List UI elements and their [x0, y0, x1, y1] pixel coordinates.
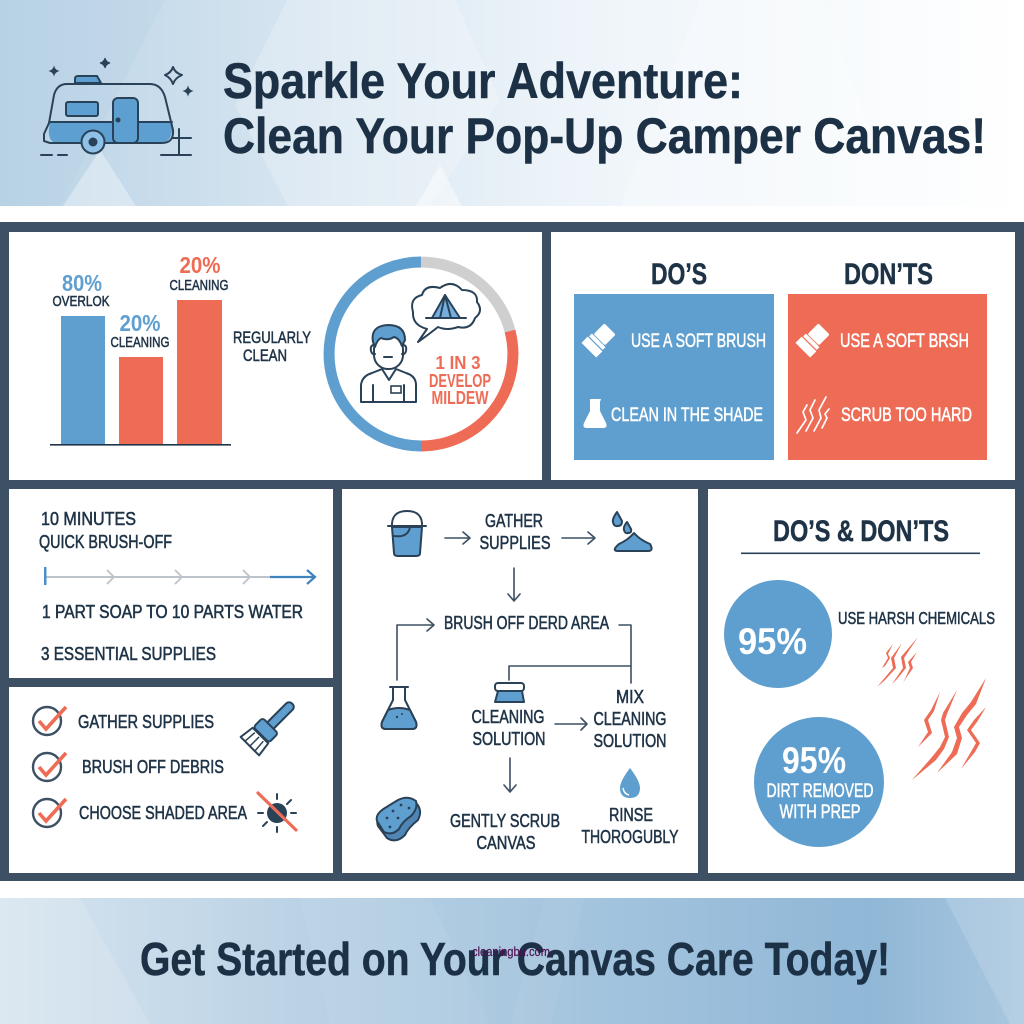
icon: crossed-out sun — [258, 793, 296, 832]
do's box: CLEAN IN THE SHADE — [611, 405, 763, 426]
icon: paint brush — [241, 695, 301, 755]
do's box: USE A SOFT BRUSH — [631, 331, 766, 352]
bar chart — [50, 252, 231, 446]
watermark: cleaningbu.com — [472, 944, 550, 959]
step: mix cleaning solution — [594, 687, 666, 751]
stat circle: 95%: 95% — [738, 621, 807, 662]
heading: DO’S & DON’TS — [773, 515, 949, 548]
check item: choose shaded area: CHOOSE SHADED AREA — [79, 802, 248, 823]
title: Sparkle Your Adventure: — [223, 53, 743, 109]
check item: choose shaded area — [33, 799, 248, 827]
stat circle: dirt removed: DIRT REMOVED — [766, 781, 874, 802]
connector — [509, 625, 631, 683]
fact: ten minutes: 10 MINUTES — [41, 509, 136, 529]
step: brush off area: BRUSH OFF DERD AREA — [444, 613, 609, 633]
stat circle: dirt removed: WITH PREP — [780, 802, 860, 823]
header banner — [0, 0, 1024, 206]
icon: person — [361, 325, 416, 402]
icon: soap drops — [613, 512, 652, 551]
bar chart: CLEANING — [110, 334, 170, 351]
icon: camper trailer with sparkles — [41, 58, 192, 155]
step: gather supplies — [480, 511, 550, 553]
fact: ten minutes: QUICK BRUSH-OFF — [39, 532, 172, 552]
icon: large scratches — [912, 678, 986, 780]
step: gather supplies: GATHER — [485, 511, 543, 531]
step: gather supplies: SUPPLIES — [480, 533, 550, 553]
timeline arrow — [44, 567, 315, 585]
regularly clean label — [233, 328, 311, 365]
stat circle: 95% — [724, 580, 832, 688]
bar chart: CLEANING — [170, 277, 228, 294]
step: rinse thoroughly: THOROGUBLY — [582, 827, 678, 847]
panel: do's and don'ts stats — [708, 489, 1015, 873]
bar chart: 20% — [120, 310, 160, 336]
step: gently scrub canvas: CANVAS — [476, 833, 536, 853]
icon: thought bubble with tent — [412, 284, 480, 342]
do's heading: DO’S — [651, 258, 707, 291]
step: rinse thoroughly — [582, 805, 678, 847]
step: cleaning solution: SOLUTION — [472, 729, 546, 749]
don'ts heading: DON’TS — [844, 258, 933, 291]
step: cleaning solution — [472, 707, 546, 749]
bar chart: 20% — [180, 252, 220, 278]
arrow — [504, 758, 516, 792]
fact: essential supplies: 3 ESSENTIAL SUPPLIES — [41, 644, 216, 664]
call to action: Get Started on Your Canvas Care Today! — [140, 933, 890, 985]
title — [223, 53, 986, 164]
don'ts box: SCRUB TOO HARD — [841, 405, 972, 426]
icon: scrub brush — [495, 683, 524, 702]
regularly clean label: CLEAN — [243, 346, 287, 365]
don'ts box: USE A SOFT BRSH — [840, 331, 969, 352]
do's box — [574, 294, 774, 460]
fact: soap ratio: 1 PART SOAP TO 10 PARTS WATER — [42, 602, 303, 622]
bar chart: OVERLOK — [52, 293, 110, 310]
arrow — [508, 568, 520, 601]
don'ts box — [788, 294, 987, 460]
panel: quick facts — [9, 489, 333, 678]
fact: ten minutes — [39, 509, 172, 552]
step: gently scrub canvas: GENTLY SCRUB — [450, 811, 560, 831]
check item: gather supplies: GATHER SUPPLIES — [78, 711, 214, 732]
step: rinse thoroughly: RINSE — [609, 805, 653, 825]
panel: checklist — [9, 687, 333, 873]
ring caption — [429, 353, 491, 408]
panel: statistics — [9, 232, 542, 480]
icon: white scratches — [797, 397, 829, 433]
icon: bucket — [388, 511, 426, 556]
icon: white brush — [581, 322, 617, 358]
icon: small scratches — [877, 637, 918, 687]
arrow — [562, 532, 595, 544]
check item: gather supplies — [33, 707, 214, 735]
bar chart: 80% — [62, 270, 102, 296]
step: gently scrub canvas — [450, 811, 560, 853]
stat circle: dirt removed — [754, 717, 884, 847]
arrow — [445, 532, 470, 544]
step: mix cleaning solution: MIX — [616, 687, 644, 707]
ring caption: 1 IN 3 — [436, 353, 480, 373]
icon: water drop — [620, 768, 640, 798]
stat circle: dirt removed: 95% — [782, 740, 846, 781]
icon: sponge — [377, 798, 420, 840]
check item: brush off debris — [33, 753, 224, 781]
arrow — [555, 718, 587, 730]
regularly clean label: REGULARLY — [233, 328, 311, 347]
icon: white brush — [795, 322, 831, 358]
panel: do's and don'ts boxes — [551, 232, 1015, 480]
step: cleaning solution: CLEANING — [472, 707, 544, 727]
icon: white flask — [583, 399, 607, 428]
footer banner — [0, 898, 1024, 1024]
step: mix cleaning solution: SOLUTION — [594, 731, 666, 751]
icon: flask — [382, 687, 416, 729]
ring caption: DEVELOP — [429, 371, 491, 391]
ring caption: MILDEW — [432, 388, 489, 408]
ring chart with person — [329, 262, 513, 446]
panel: process flow — [342, 489, 698, 873]
check item: brush off debris: BRUSH OFF DEBRIS — [82, 756, 224, 777]
step: mix cleaning solution: CLEANING — [594, 709, 666, 729]
arrow: flask to brush off — [397, 619, 434, 680]
dark frame behind panels — [0, 222, 1024, 881]
